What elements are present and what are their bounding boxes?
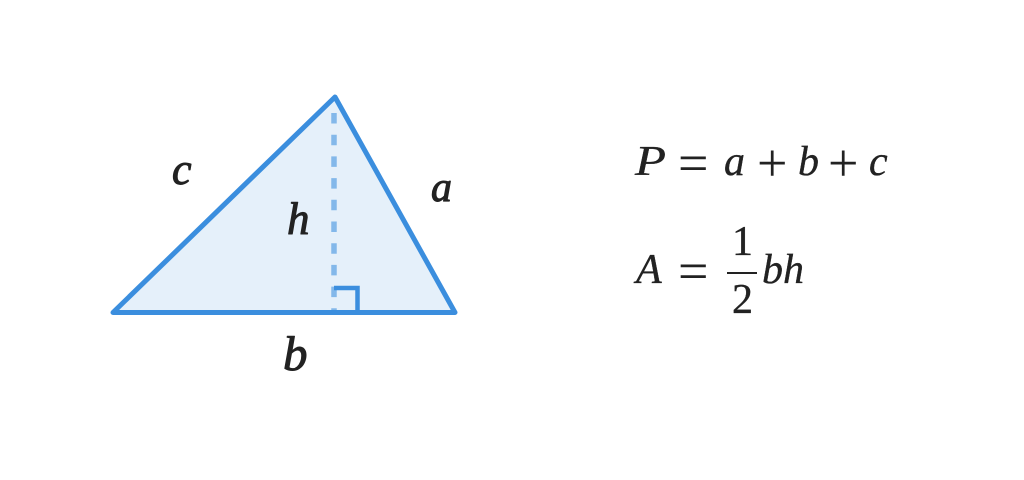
label b: b — [283, 326, 308, 381]
area formula: 2 — [732, 277, 753, 323]
right angle marker — [334, 288, 358, 312]
label c: c — [172, 145, 192, 194]
area formula: b — [762, 247, 783, 293]
perimeter formula: = — [678, 133, 708, 193]
triangle outline — [113, 97, 455, 312]
perimeter formula — [634, 133, 888, 193]
area formula: h — [783, 247, 804, 293]
perimeter formula: + — [757, 133, 787, 193]
perimeter formula: + — [828, 133, 858, 193]
area formula: 1 — [732, 219, 753, 265]
triangle fill — [113, 97, 455, 312]
area formula: A — [633, 247, 662, 293]
dashed height line — [331, 113, 337, 312]
perimeter formula: b — [798, 139, 819, 185]
label a: a — [431, 165, 452, 211]
area formula: = — [678, 241, 708, 301]
perimeter formula: c — [869, 139, 888, 185]
perimeter formula: P — [634, 139, 666, 185]
label h: h — [287, 194, 310, 244]
perimeter formula: a — [724, 139, 745, 185]
triangle diagram — [113, 97, 455, 381]
area formula — [633, 219, 804, 323]
